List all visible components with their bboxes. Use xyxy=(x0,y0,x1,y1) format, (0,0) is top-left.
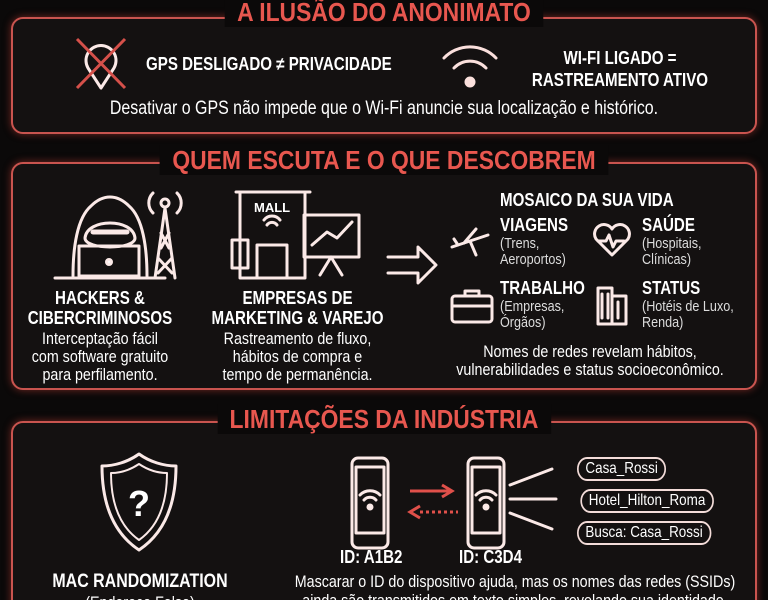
item: status: Renda) xyxy=(642,314,683,331)
text: empresas: Rastreamento de fluxo, xyxy=(224,329,371,348)
icon: hacker and tower xyxy=(54,191,183,280)
text: mascarar xyxy=(295,572,735,600)
ssid pills: Busca: Casa_Rossi xyxy=(585,524,703,541)
item: saude xyxy=(593,214,702,268)
item: status xyxy=(596,278,734,331)
text: hackers: HACKERS & xyxy=(55,288,145,308)
arrow xyxy=(386,246,438,285)
item: saude: SAÚDE xyxy=(642,215,695,235)
text: hackers: para perfilamento. xyxy=(42,365,158,384)
text: empresas: hábitos de compra e xyxy=(233,347,362,366)
icon: shield: ? xyxy=(128,483,150,524)
panel: limitacoes xyxy=(11,421,757,600)
item: viagens: (Trens, xyxy=(500,235,539,252)
text: mascarar: Mascarar o ID do dispositivo ajuda, mas os nomes das redes (SSIDs) xyxy=(295,572,735,591)
text: mac randomization: MAC RANDOMIZATION xyxy=(52,571,228,592)
text: hackers xyxy=(28,288,172,384)
panel: anonimato xyxy=(11,17,757,134)
item: status: (Hotéis de Luxo, xyxy=(642,298,734,315)
text: wifi ligado xyxy=(532,48,708,90)
text: hackers: Interceptação fácil xyxy=(42,329,158,348)
text: empresas xyxy=(212,288,383,384)
text: desativar gps: Desativar o GPS não impede que o Wi-Fi anuncie sua localização e histórico. xyxy=(110,98,658,119)
text: hackers: com software gratuito xyxy=(32,347,168,366)
text: nomes de redes: Nomes de redes revelam hábitos, xyxy=(483,342,697,361)
item: trabalho: TRABALHO xyxy=(500,278,585,298)
text: ID: C3D4 xyxy=(459,547,522,567)
ssid pills: Hotel_Hilton_Roma xyxy=(589,492,705,509)
icon: mall: MALL xyxy=(254,200,290,215)
icon: crossed gps pin xyxy=(76,38,126,90)
text: nomes de redes: vulnerabilidades e status socioeconômico. xyxy=(456,360,724,379)
text: empresas: tempo de permanência. xyxy=(222,365,373,384)
item: trabalho: Órgãos) xyxy=(500,314,546,331)
text: wifi ligado: WI-FI LIGADO = xyxy=(564,48,676,68)
text: empresas: MARKETING & VAREJO xyxy=(212,308,383,328)
icon: mall xyxy=(230,190,360,280)
mosaic heading: MOSAICO DA SUA VIDA xyxy=(500,190,674,210)
text: nomes de redes xyxy=(456,342,724,379)
item: status: STATUS xyxy=(642,278,700,298)
phones and arrows xyxy=(350,456,558,550)
text: wifi ligado: RASTREAMENTO ATIVO xyxy=(532,70,708,90)
item: viagens xyxy=(450,215,568,268)
icon: shield xyxy=(100,452,178,552)
ssid pills: Casa_Rossi xyxy=(585,460,658,477)
item: trabalho xyxy=(450,278,585,331)
item: saude: (Hospitais, xyxy=(642,235,702,252)
item: saude: Clínicas) xyxy=(642,251,691,268)
item: viagens: VIAGENS xyxy=(500,215,568,235)
icon: wifi xyxy=(442,45,498,88)
panel: quem escuta xyxy=(11,162,757,390)
item: trabalho: (Empresas, xyxy=(500,298,564,315)
ssid pills xyxy=(577,457,714,545)
text: hackers: CIBERCRIMINOSOS xyxy=(28,308,172,328)
item: viagens: Aeroportos) xyxy=(500,251,566,268)
text: empresas: EMPRESAS DE xyxy=(242,288,353,308)
title: limitacoes: LIMITAÇÕES DA INDÚSTRIA xyxy=(230,404,538,434)
labels: ids: ID: A1B2 xyxy=(340,547,402,567)
text: gps desligado: GPS DESLIGADO ≠ PRIVACIDADE xyxy=(146,54,392,74)
title: quem escuta: QUEM ESCUTA E O QUE DESCOBREM xyxy=(172,145,596,175)
